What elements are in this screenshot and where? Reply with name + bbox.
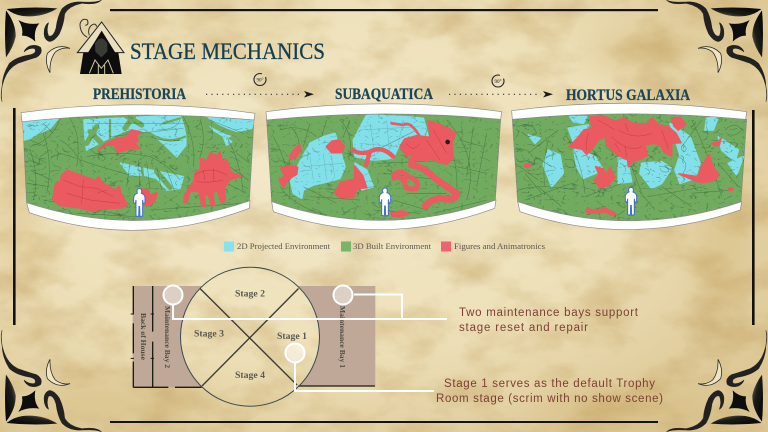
octopus head [400,121,455,164]
back of house and maintenance bays [131,286,375,387]
crab and small creatures [326,140,344,153]
icon: theatre house [77,19,124,74]
legend: Figures and Animatronics [454,242,545,251]
ornament: bottom-left corner [1,330,102,432]
bay labels: Back of House [139,313,148,361]
callout text: stage 1: Stage 1 serves as the default Trophy [444,378,655,390]
projected water [291,115,428,198]
panel: Subaquatica stage [266,104,502,230]
title: STAGE MECHANICS [130,39,325,64]
stage plan diagram: Maintenance Bay 1 [338,306,347,368]
callout text: maintenance bays: Two maintenance bays support [459,307,639,319]
giant flower [569,116,681,167]
legend: 2D Projected Environment [237,242,331,251]
stegosaurus [184,152,242,207]
ornament: top-right corner [666,0,767,102]
arrow: rotate 90 degrees to Subaquatica [206,74,314,98]
arrow: rotate 90 degrees to Hortus Galaxia [449,75,553,98]
arrow: rotate 90 degrees to Subaquatica: 90° [256,78,264,84]
callout connector: maintenance bays [164,286,447,319]
stage plan diagram [131,267,375,406]
stage labels: Stage 2 [235,290,265,300]
panel: Prehistoria stage [20,104,256,231]
stage plan diagram: Maintenance Bay 2 [163,306,172,368]
callout text: maintenance bays: stage reset and repair [459,322,588,334]
small creature behind figure [142,189,157,205]
rotating stage circle [180,267,320,406]
panel: Hortus Galaxia stage [511,102,747,230]
heading: Hortus Galaxia: HORTUS GALAXIA [566,87,690,104]
callout text: stage 1 [436,378,663,405]
callout connector: stage 1 [286,344,434,391]
foliage over the sky [87,115,243,187]
projected sky [23,115,255,190]
fish [335,166,367,198]
stage plan diagram: Stage 4 [235,371,265,381]
callout text: maintenance bays [459,307,639,334]
butterflies and bugs [594,167,615,188]
projected sky [528,117,743,188]
ornament: bottom-right corner [666,330,767,432]
stage plan diagram: Stage 3 [194,330,224,340]
legend: 3D Built Environment [353,242,432,251]
ornament: top-left corner [1,0,102,102]
pterosaur [98,130,141,152]
stage plan diagram: Stage 1 [277,332,307,342]
legend [224,242,545,252]
arrow: rotate 90 degrees to Hortus Galaxia: 90° [494,80,502,85]
tentacles [412,157,457,206]
heading: Subaquatica: SUBAQUATICA [335,86,433,103]
heading: Prehistoria: PREHISTORIA [93,86,186,103]
callout text: stage 1: Room stage (scrim with no show scene) [436,393,663,405]
horned dinosaur [53,170,127,211]
